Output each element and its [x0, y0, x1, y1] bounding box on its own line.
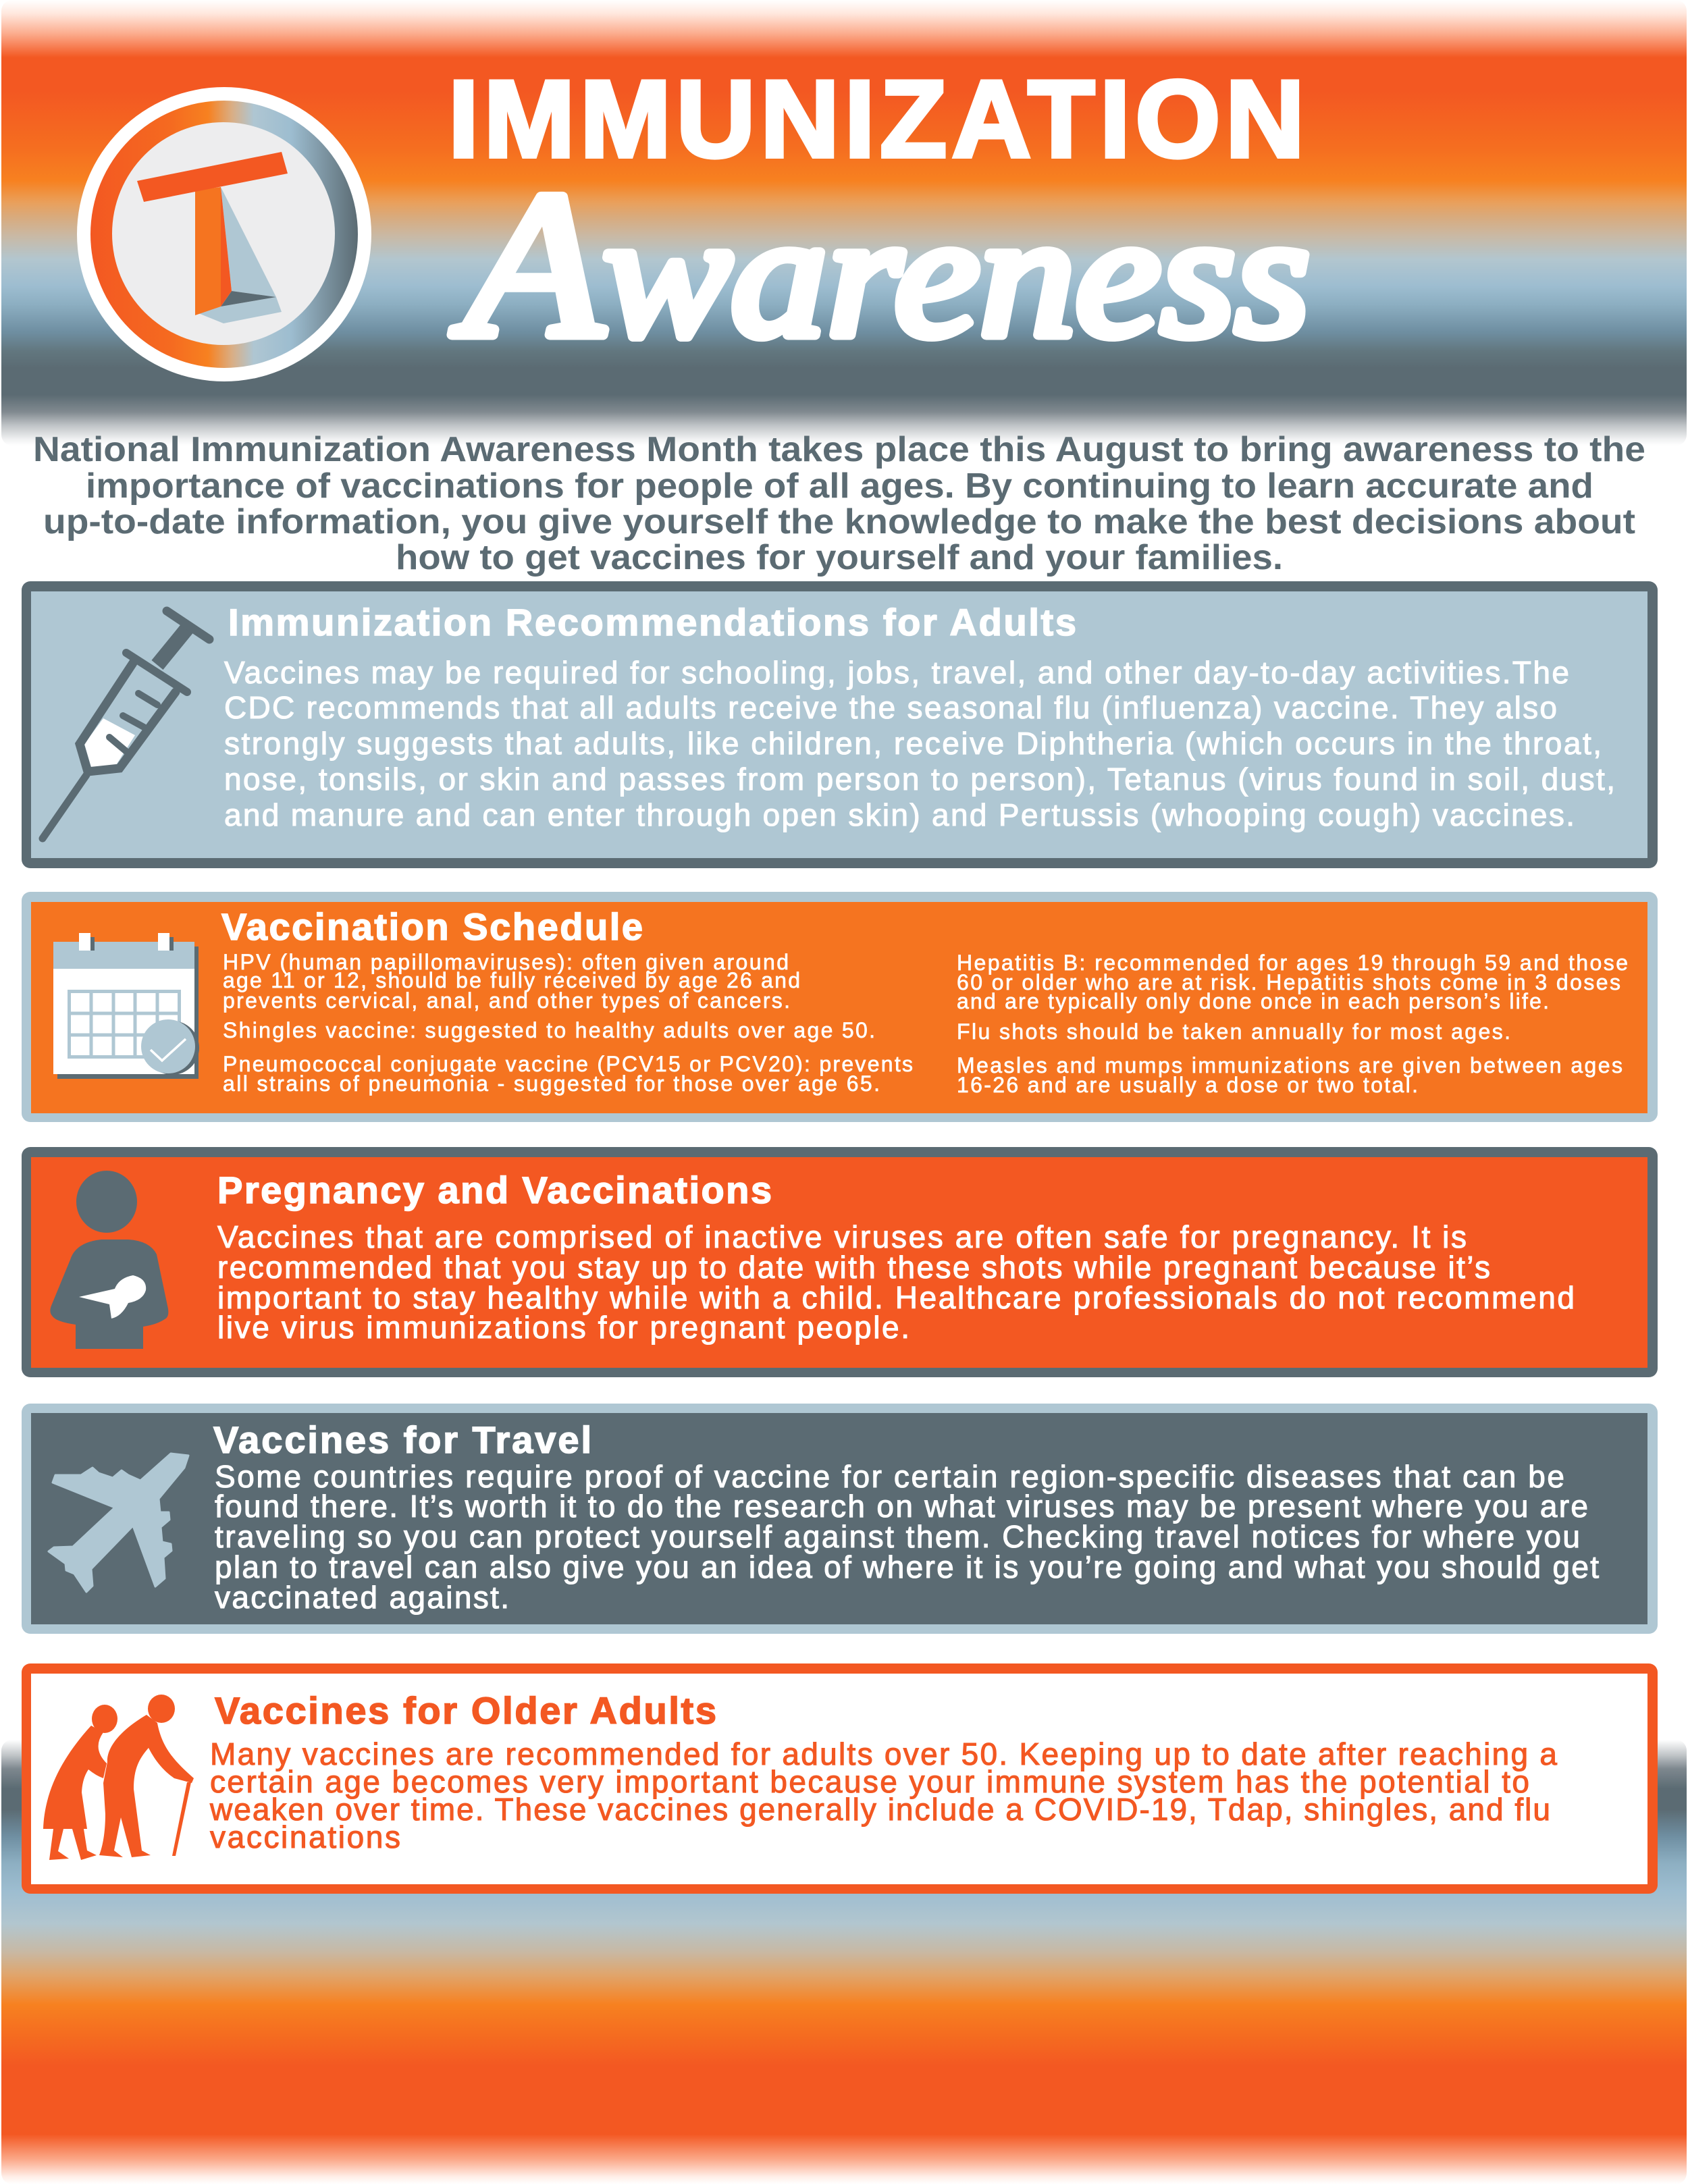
heading: Vaccines for Older Adults: [215, 1689, 716, 1732]
heading: Vaccines for Travel: [213, 1418, 591, 1461]
body text: CDC recommends that all adults receive the seasonal flu (influenza) vaccine. They also: [224, 690, 1557, 725]
panel: immunization recommendations for adults: [22, 581, 1658, 868]
body text: [215, 1459, 1599, 1615]
panel: pregnancy and vaccinations: [22, 1147, 1658, 1377]
right column text: 16-26 and are usually a dose or two total.: [957, 1073, 1418, 1097]
icon: elderly couple with cane: [43, 1695, 194, 1860]
body text: [217, 1219, 1575, 1345]
intro text: importance of vaccinations for people of all ages. By continuing to learn accurate and: [86, 467, 1593, 506]
right column text: Flu shots should be taken annually for most ages.: [957, 1019, 1510, 1044]
right column text: [957, 951, 1628, 1097]
left column text: age 11 or 12, should be fully received by age 26 and: [223, 968, 800, 992]
intro text: [33, 430, 1645, 577]
body text: certain age becomes very important because your immune system has the potential to: [210, 1764, 1529, 1799]
intro text: National Immunization Awareness Month takes place this August to bring awareness to the: [33, 430, 1645, 469]
panel: vaccination schedule: [22, 892, 1658, 1122]
body text: vaccinated against.: [215, 1580, 509, 1615]
intro text: up-to-date information, you give yourself the knowledge to make the best decisions about: [43, 502, 1635, 541]
left column text: all strains of pneumonia - suggested for those over age 65.: [223, 1071, 880, 1096]
right column text: Hepatitis B: recommended for ages 19 through 59 and those: [957, 951, 1628, 975]
body text: weaken over time. These vaccines generally include a COVID-19, Tdap, shingles, and flu: [209, 1792, 1550, 1827]
heading: Immunization Recommendations for Adults: [228, 601, 1076, 643]
title: IMMUNIZATION: IMMUNIZATION: [448, 58, 1304, 180]
icon: syringe: [43, 611, 209, 838]
right column text: 60 or older who are at risk. Hepatitis shots come in 3 doses: [957, 970, 1620, 994]
right column text: and are typically only done once in each person’s life.: [957, 989, 1549, 1013]
body text: vaccinations: [210, 1819, 400, 1855]
body text: Some countries require proof of vaccine for certain region-specific diseases that can be: [215, 1459, 1564, 1494]
body text: traveling so you can protect yourself against them. Checking travel notices for where you: [215, 1519, 1580, 1554]
body text: Vaccines may be required for schooling, jobs, travel, and other day-to-day activities.The: [224, 655, 1569, 690]
body text: recommended that you stay up to date with these shots while pregnant because it’s: [217, 1250, 1490, 1285]
left column text: prevents cervical, anal, and other types of cancers.: [223, 988, 790, 1013]
heading: Pregnancy and Vaccinations: [217, 1169, 772, 1211]
icon: airplane: [49, 1454, 188, 1592]
body text: Many vaccines are recommended for adults over 50. Keeping up to date after reaching a: [210, 1736, 1557, 1772]
panel: vaccines for older adults: [22, 1663, 1658, 1894]
left column text: HPV (human papillomaviruses): often given around: [223, 950, 789, 974]
body text: important to stay healthy while with a child. Healthcare professionals do not recommend: [217, 1280, 1575, 1315]
body text: [209, 1736, 1557, 1855]
title: Awareness script: Awareness: [450, 149, 1310, 381]
header gradient banner: [1, 0, 1687, 446]
icon: company logo: [77, 87, 371, 381]
left column text: Pneumococcal conjugate vaccine (PCV15 or PCV20): prevents: [223, 1052, 913, 1076]
left column text: [223, 950, 913, 1096]
body text: nose, tonsils, or skin and passes from person to person), Tetanus (virus found in soil, dust,: [224, 762, 1615, 797]
body text: Vaccines that are comprised of inactive viruses are often safe for pregnancy. It is: [217, 1219, 1467, 1254]
body text: [224, 655, 1615, 832]
body text: found there. It’s worth it to do the research on what viruses may be present where you are: [215, 1489, 1588, 1524]
intro text: how to get vaccines for yourself and your families.: [396, 538, 1283, 577]
body text: live virus immunizations for pregnant people.: [217, 1310, 909, 1345]
heading: Vaccination Schedule: [221, 905, 643, 948]
footer gradient band: [1, 1740, 1687, 2184]
right column text: Measles and mumps immunizations are given between ages: [957, 1053, 1623, 1077]
left column text: Shingles vaccine: suggested to healthy adults over age 50.: [223, 1018, 875, 1042]
icon: person holding baby: [50, 1171, 168, 1349]
body text: strongly suggests that adults, like children, receive Diphtheria (which occurs in the throat,: [224, 726, 1602, 761]
panel: vaccines for travel: [22, 1404, 1658, 1634]
icon: calendar: [53, 933, 199, 1079]
body text: plan to travel can also give you an idea of where it is you’re going and what you should get: [215, 1549, 1599, 1584]
body text: and manure and can enter through open skin) and Pertussis (whooping cough) vaccines.: [224, 797, 1575, 832]
